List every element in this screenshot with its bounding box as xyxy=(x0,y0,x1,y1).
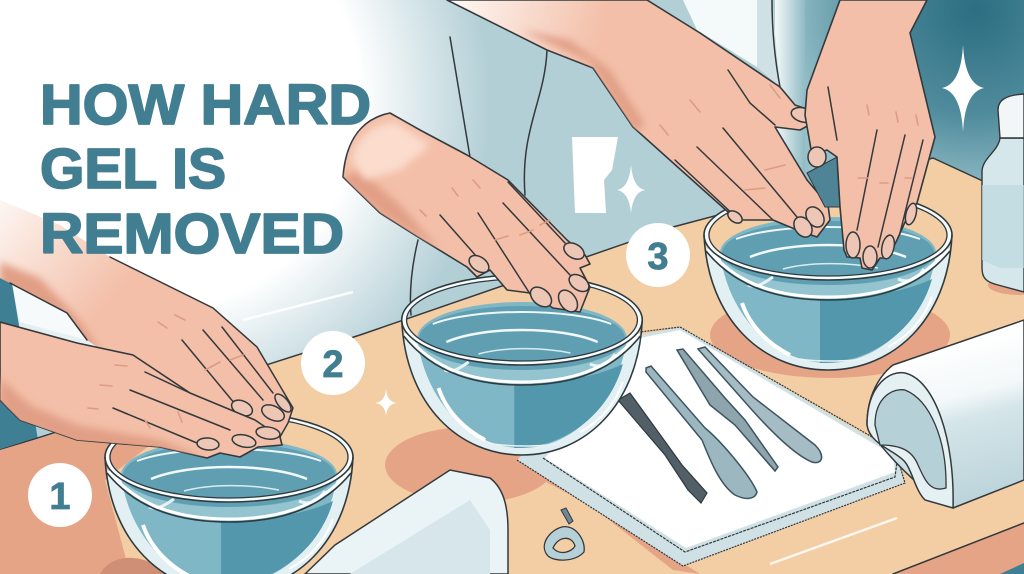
nail ring icon xyxy=(544,508,584,560)
lamp device right xyxy=(867,320,1024,508)
title: HOW HARD xyxy=(40,73,371,137)
bowl 3 xyxy=(704,190,952,370)
step 1 hands xyxy=(0,200,294,458)
step badge 2 xyxy=(301,331,365,395)
bowl 2 xyxy=(402,275,642,455)
coat lines xyxy=(410,0,780,315)
title: REMOVED xyxy=(40,202,344,266)
block device bottom xyxy=(305,470,508,574)
tool: file xyxy=(698,347,822,463)
sparkles and white shape on coat xyxy=(375,45,984,416)
table xyxy=(0,158,1024,574)
bowl 1 xyxy=(105,412,353,574)
step badge 1 xyxy=(28,463,92,527)
step 2 hand xyxy=(343,113,592,315)
towel with tools xyxy=(517,327,905,566)
step badge 2: 2 xyxy=(322,344,344,386)
tool handle held in hand xyxy=(807,157,841,207)
step badge 3: 3 xyxy=(647,236,669,278)
tool: tweezers xyxy=(618,393,707,503)
tool: spatula xyxy=(646,366,757,498)
bottle xyxy=(982,94,1024,295)
step badge 3 xyxy=(626,223,690,287)
title: GEL IS xyxy=(40,137,226,201)
title xyxy=(40,73,371,266)
step 3 hands xyxy=(447,0,935,270)
step badge 1: 1 xyxy=(49,476,71,518)
tool: pusher xyxy=(677,349,778,471)
